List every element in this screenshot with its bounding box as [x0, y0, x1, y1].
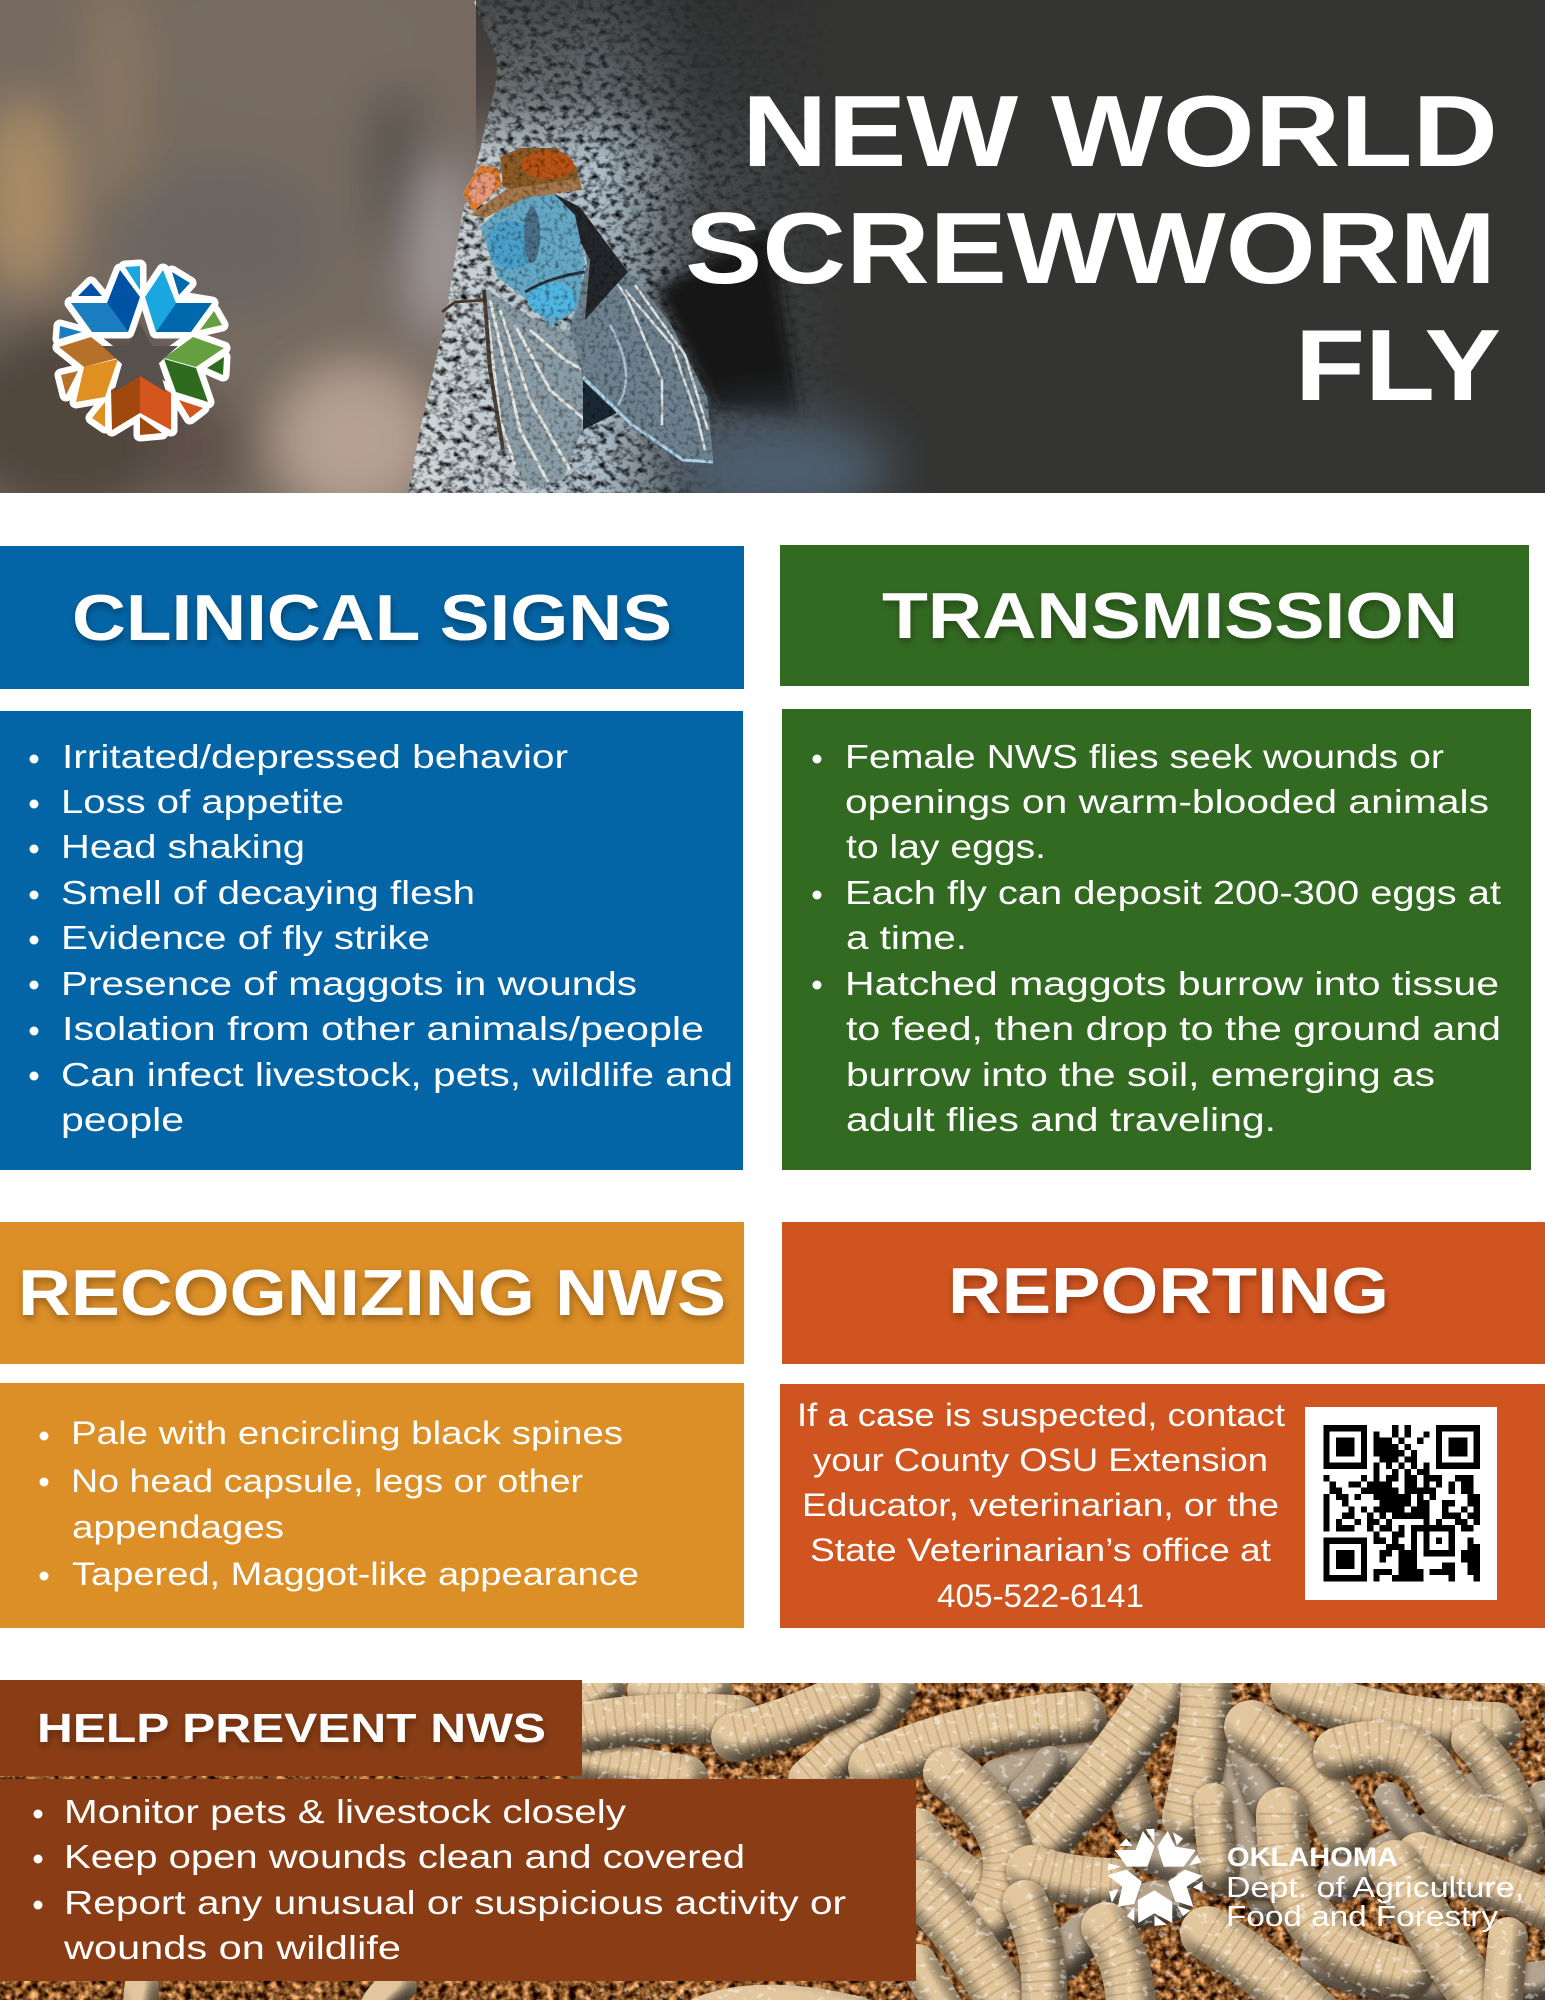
reporting text: State Veterinarian’s office at	[810, 1532, 1271, 1568]
heading: reporting: REPORTING	[948, 1254, 1389, 1327]
transmission text: Hatched maggots burrow into tissue	[845, 966, 1499, 1003]
agency name: Food and Forestry	[1226, 1901, 1499, 1933]
clinical signs text: Presence of maggots in wounds	[61, 966, 637, 1003]
blurred photo background	[0, 27, 474, 493]
fly head	[500, 148, 578, 189]
transmission text: Female NWS flies seek wounds or	[845, 739, 1444, 776]
transmission text: a time.	[846, 920, 967, 957]
star centre	[102, 323, 178, 392]
reporting text	[797, 1397, 1285, 1614]
recognizing bullets	[40, 1432, 48, 1580]
panel: help prevent list	[0, 1779, 916, 1981]
reporting text: Educator, veterinarian, or the	[802, 1487, 1279, 1523]
recognizing text: No head capsule, legs or other	[71, 1463, 583, 1499]
help prevent text: Keep open wounds clean and covered	[64, 1839, 745, 1876]
clinical signs text: people	[61, 1102, 184, 1139]
recognizing text: Tapered, Maggot-like appearance	[72, 1556, 639, 1592]
clinical signs text: Irritated/depressed behavior	[62, 739, 568, 776]
panel: reporting body	[780, 1384, 1545, 1628]
heading: help prevent nws: HELP PREVENT NWS	[37, 1705, 546, 1751]
clinical signs text: Head shaking	[61, 829, 305, 866]
reporting text: your County OSU Extension	[813, 1442, 1268, 1478]
fly	[442, 148, 713, 490]
recognizing text: Pale with encircling black spines	[71, 1415, 623, 1451]
title: NEW WORLD	[742, 76, 1498, 188]
clinical signs text: Can infect livestock, pets, wildlife and	[61, 1057, 733, 1094]
clinical signs text	[61, 739, 733, 1139]
maggots	[140, 1985, 142, 2000]
title: SCREWWORM	[685, 193, 1496, 305]
rock texture	[408, 0, 813, 493]
panel: recognizing list	[0, 1383, 744, 1628]
heading: recognizing nws: RECOGNIZING NWS	[18, 1256, 726, 1329]
transmission text: openings on warm-blooded animals	[845, 784, 1489, 821]
maggot highlights	[580, 1683, 1545, 2000]
reporting text: If a case is suspected, contact	[797, 1397, 1285, 1433]
transmission text: to lay eggs.	[846, 829, 1046, 866]
clinical signs bullets	[30, 754, 38, 1080]
help prevent text	[63, 1794, 846, 1967]
agency name: OKLAHOMA	[1227, 1842, 1398, 1872]
transmission text: adult flies and traveling.	[846, 1102, 1276, 1139]
blue rock patch	[670, 418, 890, 522]
title: FLY	[1295, 310, 1501, 422]
recognizing text	[71, 1415, 639, 1592]
dark shadow behind wing	[655, 225, 800, 420]
fly leg	[442, 300, 487, 312]
maggot photo	[0, 1680, 1545, 2000]
state star logo	[59, 266, 224, 435]
fly eye	[463, 165, 502, 212]
heading: clinical signs: CLINICAL SIGNS	[72, 581, 672, 654]
help prevent text: Monitor pets & livestock closely	[64, 1794, 626, 1831]
clinical signs text: Smell of decaying flesh	[61, 875, 475, 912]
panel: transmission list	[782, 709, 1531, 1170]
help prevent text: wounds on wildlife	[63, 1930, 401, 1967]
dark right side	[608, 0, 848, 493]
title	[685, 76, 1501, 422]
rock top shading	[476, 0, 806, 154]
reporting text: 405-522-6141	[937, 1578, 1144, 1614]
help prevent bullets	[34, 1810, 42, 1910]
transmission text: to feed, then drop to the ground and	[846, 1011, 1501, 1048]
panel: help prevent heading	[0, 1680, 582, 1776]
panel: clinical signs heading	[0, 546, 744, 689]
panel: recognizing heading	[0, 1222, 744, 1364]
transmission text: Each fly can deposit 200-300 eggs at	[845, 875, 1502, 912]
heading: transmission: TRANSMISSION	[882, 579, 1458, 652]
panel: clinical signs list	[0, 711, 743, 1170]
clinical signs text: Loss of appetite	[61, 784, 344, 821]
clinical signs text: Evidence of fly strike	[61, 920, 430, 957]
thorax	[480, 193, 585, 327]
agency name	[1226, 1842, 1524, 1933]
left wing	[483, 287, 585, 490]
panel: transmission heading	[780, 545, 1529, 686]
thorax dark side	[553, 193, 628, 320]
clinical signs text: Isolation from other animals/people	[62, 1011, 704, 1048]
white state star logo	[1108, 1829, 1203, 1926]
QR code	[1305, 1407, 1497, 1600]
solid dark background	[848, 0, 1545, 493]
agency name: Dept. of Agriculture,	[1226, 1872, 1524, 1904]
help prevent text: Report any unusual or suspicious activity or	[64, 1885, 846, 1922]
transmission bullets	[812, 754, 822, 990]
right wing	[570, 250, 714, 464]
recognizing text: appendages	[72, 1509, 284, 1545]
hero banner	[0, 0, 1545, 493]
transmission text	[845, 739, 1502, 1139]
panel: reporting heading	[782, 1222, 1545, 1364]
transmission text: burrow into the soil, emerging as	[846, 1057, 1435, 1094]
